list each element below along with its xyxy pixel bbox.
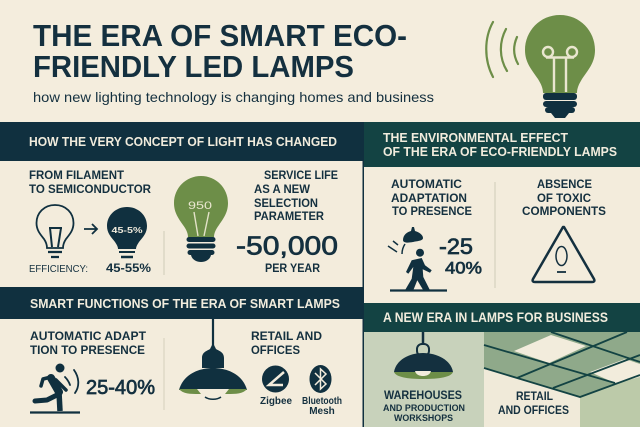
icon: semiconductor bulb: 45-5% [112,226,142,235]
text: automatic adaptation [30,331,146,357]
text: retail and offices [498,391,569,417]
text: absence of toxic components: OF TOXIC [537,193,591,205]
text: service life: PARAMETER [254,211,325,223]
text: automatic adaptation to presence: TO PRESENCE [392,206,472,218]
text: efficiency: 45-55% [106,263,151,275]
text: from filament to semiconductor: TO SEMICONDUCTOR [29,184,152,196]
title: THE ERA OF SMART ECO- [33,19,407,53]
text: warehouses: AND PRODUCTION [383,403,465,414]
icon: arrow [84,224,97,234]
stat: -25 40%: 40% [445,259,482,278]
text: automatic adaptation to presence: AUTOMATIC [391,179,462,191]
stat: 50,000 per year: PER YEAR [265,263,321,275]
icon: pendant lamp [179,319,247,399]
icon: ceiling lamp and walking person [388,227,447,290]
text: absence of toxic components [522,179,606,218]
icon: zigbee [260,366,292,407]
heading: concept of light: HOW THE VERY CONCEPT OF LIGHT HAS CHANGED [29,135,337,149]
subtitle: how new lighting technology is changing homes and business [33,89,434,105]
panel: environmental effect [364,122,640,303]
icon: bluetooth mesh: Mesh [309,406,335,417]
title: FRIENDLY LED LAMPS [33,50,354,84]
text: absence of toxic components: ABSENCE [537,179,592,191]
panel: lamps for business [364,303,640,427]
text: efficiency [29,263,151,275]
text: service life [254,170,338,223]
text: retail and offices: OFFICES [251,345,300,357]
text: automatic adaptation to presence [391,179,472,218]
text: efficiency: EFFICIENCY: [29,264,88,275]
icon: warning triangle [533,227,594,282]
stat: 50,000 per year [236,230,338,275]
icon: zigbee: Zigbee [260,396,292,407]
heading: lamps for business: A NEW ERA IN LAMPS FOR BUSINESS [383,310,608,325]
text: retail and offices: AND OFFICES [498,405,569,417]
text: warehouses: WORKSHOPS [394,413,453,424]
text: retail and offices [251,331,322,357]
heading: smart functions: SMART FUNCTIONS OF THE ERA OF SMART LAMPS [30,297,340,311]
heading: environmental effect [364,122,640,167]
text: service life: SERVICE LIFE [264,170,338,182]
text: retail and offices: RETAIL [516,391,553,403]
text: service life: SELECTION [254,198,318,210]
icon: hero light bulb [486,15,595,118]
icon: bluetooth mesh: Bluetooth [302,396,342,407]
stat: -25 40% [439,234,482,278]
text: warehouses: WAREHOUSES [384,390,462,402]
text: automatic adaptation: AUTOMATIC ADAPT [30,331,146,343]
panel: concept of light [0,122,364,287]
text: service life: AS A NEW [254,184,310,196]
icon: green bulb: 950 [188,200,212,212]
text: retail and offices: RETAIL AND [251,331,322,343]
stat: -25 40%: -25 [439,234,473,259]
stat: 50,000 per year: -50,000 [236,230,338,260]
text: absence of toxic components: COMPONENTS [522,206,606,218]
stat: 25-40%: 25-40% [86,377,155,399]
title [33,19,407,84]
icon: running person [30,364,80,412]
icon: green bulb [174,176,228,262]
text: automatic adaptation: TION TO PRESENCE [30,345,145,357]
heading: smart functions [0,287,364,319]
panel: smart functions [0,287,364,427]
heading: environmental effect: OF THE ERA OF ECO-FRIENDLY LAMPS [383,145,617,159]
heading: lamps for business [364,303,640,332]
icon: semiconductor bulb [107,207,147,257]
text: warehouses [383,390,465,424]
text: automatic adaptation to presence: ADAPTATION [391,193,467,205]
icon: warehouse lamp [394,332,453,379]
icon: filament bulb outline [36,205,74,257]
illustration: ceiling tiles [484,332,640,397]
heading: environmental effect: THE ENVIRONMENTAL EFFECT [383,131,568,145]
heading: concept of light [0,122,364,161]
icon: bluetooth mesh [302,365,342,417]
text: from filament to semiconductor: FROM FILAMENT [29,170,124,182]
text: from filament to semiconductor [29,170,152,196]
